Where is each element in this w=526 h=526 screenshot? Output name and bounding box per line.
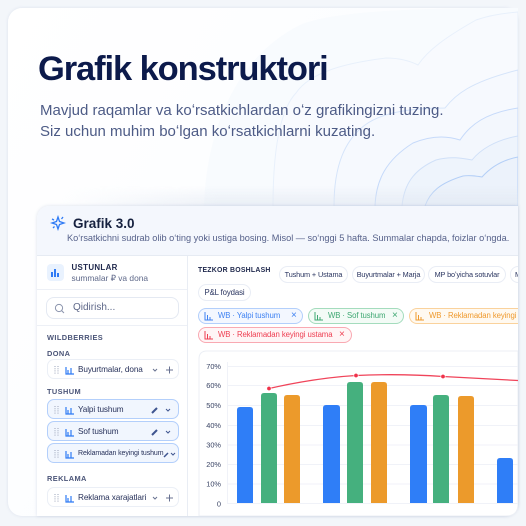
line series: [269, 375, 518, 388]
tag: WB Reklamadan keyingi: WB · Reklamadan keyingi: [429, 311, 516, 320]
panel title: Grafik 3.0: [73, 216, 135, 231]
quick start heading: TEZKOR BOSHLASH: [198, 267, 271, 274]
tag: WB Sof tushum: ×: [392, 310, 398, 321]
chip: MP bo'yicha sotuvlar: [428, 266, 506, 283]
sidebar heading: summalar ₽ va dona: [72, 273, 148, 283]
search box: Qidirish...: [73, 302, 115, 313]
panel description: Koʻrsatkichni sudrab olib oʻting yoki ustiga bosing. Misol — soʻnggi 5 hafta. Summalar chapda, foizlar oʻngda.: [67, 233, 509, 243]
tag: WB Reklamadan keyingi ustama: WB · Reklamadan keyingi ustama: [218, 330, 332, 339]
y axis labels: 60%: [206, 381, 221, 390]
y axis labels: 10%: [206, 480, 221, 488]
chip: Buyurtmalar + Marja: [352, 266, 425, 283]
chip: P&L foydasi: [198, 284, 251, 301]
tag: WB Yalpi tushum: WB · Yalpi tushum: [218, 311, 280, 320]
search box: [46, 296, 179, 318]
blue bars: [237, 405, 513, 503]
tag: WB Yalpi tushum: ×: [291, 310, 297, 321]
chip: P&L foydasi: P&L foydasi: [204, 288, 244, 297]
panel: chart builder window: [37, 206, 518, 516]
green bars: [261, 382, 449, 503]
section: Tushum: TUSHUM: [47, 386, 81, 396]
divider: search: [37, 325, 187, 326]
y axis labels: 0: [217, 500, 221, 508]
tag: WB Sof tushum: WB · Sof tushum: [328, 311, 385, 320]
panel header: [37, 206, 518, 256]
background: cloud outlines: [133, 8, 518, 206]
chart: columns and line: [198, 350, 518, 516]
icon: columns: [47, 264, 64, 281]
row: Reklamadan keyingi tushum: Reklamadan keyingi tushum: [78, 450, 163, 457]
y axis labels: 70%: [206, 362, 221, 371]
row: Yalpi tushum: [47, 399, 178, 419]
tag: WB Reklamadan keyingi ustama: [198, 327, 352, 343]
subtitle: [40, 102, 444, 140]
y axis labels: 20%: [206, 460, 221, 469]
chip: Tushum + Ustama: Tushum + Ustama: [285, 270, 342, 279]
row: Buyurtmalar: Buyurtmalar, dona: [78, 365, 143, 374]
row: Reklama xarajatlari: [47, 486, 178, 506]
tag: WB Sof tushum: [308, 308, 404, 324]
y axis labels: 50%: [206, 401, 221, 410]
icon: sparkle: [50, 215, 66, 231]
sidebar heading: [72, 263, 148, 283]
chip: Buyurtmalar + Marja: Buyurtmalar + Marja: [357, 270, 420, 279]
row: Reklama xarajatlari: Reklama xarajatlari: [78, 492, 146, 502]
tag: WB Reklamadan keyingi ustama: ×: [339, 329, 345, 340]
subtitle: Siz uchun muhim boʻlgan koʻrsatkichlarni kuzating.: [40, 122, 375, 140]
section: Dona: DONA: [47, 348, 70, 358]
y axis labels: 30%: [206, 440, 221, 450]
chip: MP bo'yicha sotuvlar: MP boʻyicha sotuvlar: [435, 270, 499, 279]
chip: cut off: [510, 266, 518, 283]
title: Grafik konstruktori: [38, 50, 328, 88]
row: Buyurtmalar: [47, 359, 178, 379]
divider: sidebar: [187, 256, 188, 516]
section: Reklama: REKLAMA: [47, 474, 87, 482]
tag: WB Yalpi tushum: [198, 308, 303, 324]
orange bars: [284, 382, 474, 503]
divider: sidebar heading: [37, 289, 187, 290]
chip: Tushum + Ustama: [279, 266, 348, 283]
row: Sof tushum: Sof tushum: [78, 427, 118, 436]
subtitle: Mavjud raqamlar va koʻrsatkichlardan oʻz grafikingizni tuzing.: [40, 102, 444, 119]
sidebar heading: USTUNLAR: [72, 263, 118, 272]
row: Yalpi tushum: Yalpi tushum: [78, 405, 124, 414]
row: Sof tushum: [47, 421, 178, 441]
y axis labels: 40%: [206, 421, 221, 430]
row: Reklamadan keyingi tushum: [47, 443, 178, 463]
tag: WB Reklamadan keyingi: [409, 308, 518, 324]
y axis labels: [206, 362, 221, 508]
section: Wildberries: WILDBERRIES: [47, 333, 103, 342]
